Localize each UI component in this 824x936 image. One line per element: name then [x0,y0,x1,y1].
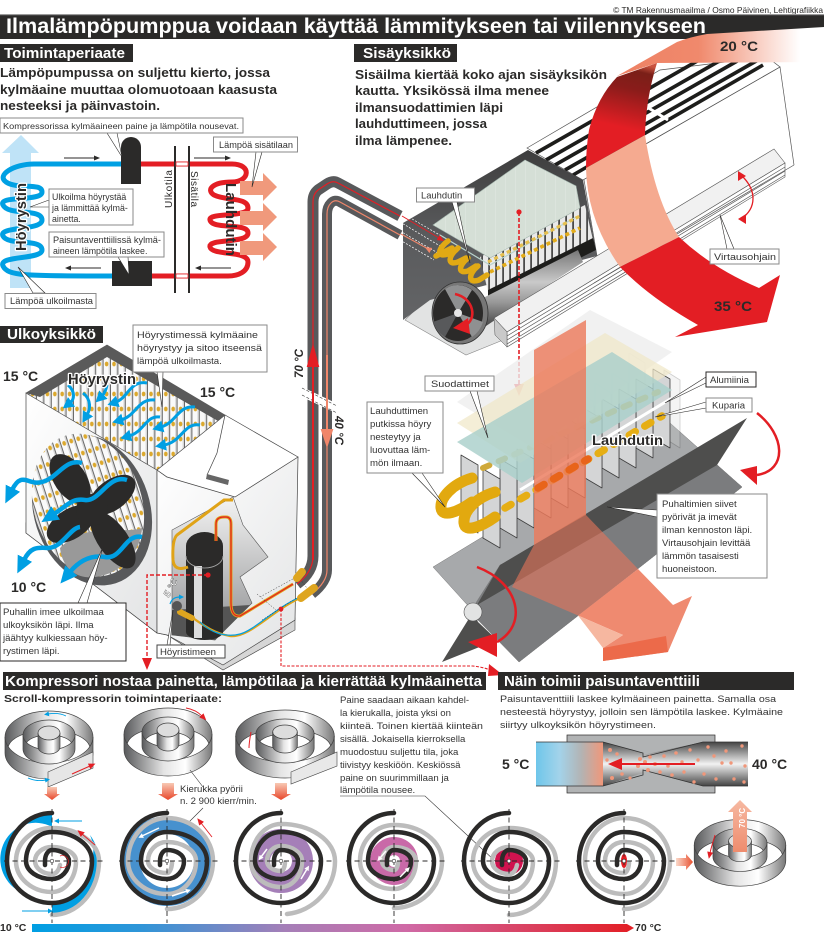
heading: paisuntaventtiili: Näin toimii paisuntaventtiili [504,673,700,690]
callout: puhallin: Puhallin imee ulkoilmaa [3,607,104,618]
fan housing ring [13,419,171,601]
label: ulkotila: Ulkotila [164,170,175,208]
refrigerant pipes [297,182,400,594]
label: 5 °C: 5 °C [502,756,529,772]
right face [157,457,298,665]
evaporator top fins [26,345,225,470]
right nozzle [633,742,703,786]
torn edge [207,415,225,475]
callout: puhaltimien siivet: ilman kennoston läpi. [662,525,752,536]
label: 15 °C right: 15 °C [200,384,235,400]
compressor tank [186,532,223,640]
heading: toimintaperiaate: Toimintaperiaate [4,45,125,62]
heat pump circuit diagram [0,118,298,308]
title bar [0,14,824,39]
label: 35 °C: 35 °C [714,298,752,314]
cold pipe [536,742,603,786]
indoor unit text: lauhduttimeen, jossa [355,116,488,131]
label: höyrystin: Höyrystin [13,183,30,251]
base plates [433,423,742,662]
droplets [605,744,747,784]
label: 70 °C: 70 °C [635,922,662,934]
unit body [403,150,597,320]
grille stripes [536,60,763,175]
top plate [157,415,298,497]
heading: sisäyksikkö: Sisäyksikkö [363,45,451,62]
hot pipe [703,742,748,786]
label: lauhdutin: Lauhdutin [222,183,239,256]
callout: kuparia: Kuparia [712,400,746,412]
callout: ulkoilma: Ulkoilma höyrystää [52,192,126,202]
gold pipes [170,500,310,636]
compressor explanation text: tiivistyy keskiöön. Keskiössä [340,760,461,771]
fan blades [40,447,144,576]
label: kierukka [180,770,257,823]
heated tubes [538,459,588,488]
unit lower edge line [594,165,794,283]
scroll frame 3 [233,809,335,923]
label: 15 °C left: 15 °C [3,368,38,384]
compressor [121,137,141,184]
label: kierukka: n. 2 900 kierr/min. [180,796,257,807]
panel: paisuntaventtiili [498,672,794,793]
compressor explanation text: muodostuu suljettu tila, joka [340,747,459,758]
condenser coil [141,164,248,276]
blower disc [432,282,488,344]
pipes to indoor unit [400,212,445,260]
intro text: Lämpöpumpussa on suljettu kierto, jossa [0,65,271,80]
dashed link to valve [279,607,503,676]
wall lines [175,146,189,293]
callout: suodattimet: Suodattimet [431,379,489,390]
label: 40 °C: 40 °C [752,756,787,772]
heading: paisuntaventtiili [498,672,794,690]
indoor unit illustration [400,27,824,355]
callout: puhaltimien siivet: lämmön tasaisesti [662,551,739,562]
scroll frame 4 [346,809,448,923]
scroll frame 6 [576,809,678,923]
callout: lauhduttimen putkissa: putkissa höyry [370,419,432,430]
fan opening [14,419,162,591]
heading: kompressori: Kompressori nostaa painetta, lämpötilaa ja kierrättää kylmäainetta [5,673,483,690]
arrow: louver swing [738,171,753,224]
label: 70 °C: 70 °C [294,348,306,378]
callout: puhaltimien siivet: Puhaltimien siivet [662,499,737,510]
expansion valve [112,261,152,286]
callout: kompressori [0,118,243,157]
valve diagram [536,735,748,793]
callout: lauhdutin: Lauhdutin [421,190,462,200]
heading: ulkoyksikkö: Ulkoyksikkö [7,326,96,343]
callout: paisuntaventtiili [49,232,164,275]
callout: virtausohjain [710,215,779,264]
callout: alumiinia: Alumiinia [710,375,750,386]
callout: lämpöä ulkoilmasta [5,267,96,308]
callout: paisuntaventtiili: Paisuntaventtiilissä kylmä- [53,235,161,245]
callout: höyrystimessä: lämpöä ulkoilmasta. [137,356,222,367]
3d scroll icon 1 [5,711,93,787]
fins rear [461,353,680,533]
temperature scale [0,922,662,934]
evaporator coil [3,164,121,276]
callout: lauhduttimen putkissa [367,402,445,507]
callout: lauhdutin [416,188,474,263]
callout: ulkoilma: ja lämmittää kylmä- [51,203,128,213]
outer pipe [297,182,400,584]
front face [26,393,157,633]
callout: puhaltimien siivet: pyörivät ja imevät [662,512,737,523]
dashed link to compressor [142,572,211,670]
callout: kuparia [655,398,752,417]
callout: höyrystimessä: höyrystyy ja sitoo itseensä [137,343,263,354]
scroll frame 5 [461,809,563,923]
title: Ilmalämpöpumppua voidaan käyttää lämmitykseen tai viilennykseen [6,15,706,38]
callout: höyristimeen [157,610,225,658]
callout: lauhduttimen putkissa: mön ilmaan. [370,458,422,469]
label: 10 °C: 10 °C [11,579,46,595]
floor plate [405,295,508,355]
callout: lämpöä sisätilaan [214,137,298,187]
callout: alumiinia [665,372,756,403]
arrow: hot flow up [308,347,318,560]
indoor unit text: kautta. Yksikössä ilma menee [355,83,549,98]
3d scroll icon 2 [124,708,212,776]
compressor explanation text [340,695,508,873]
compressor explanation text: Paine saadaan aikaan kahdel- [340,695,469,706]
arrow: left blade rotation [468,567,516,657]
callout: lämpöä ulkoilmasta: Lämpöä ulkoilmasta [10,296,93,306]
callout: höyristimeen: Höyristimeen [160,647,216,658]
callout: lämpöä sisätilaan: Lämpöä sisätilaan [219,140,293,150]
scroll frame 2 [119,809,221,923]
arrow: outdoor air [2,135,39,288]
copper tubes [483,392,662,508]
valve text: nesteestä höyrystyy, jolloin sen lämpötila laskee. Kylmäaine [500,707,783,718]
label: 20 °C: 20 °C [720,38,758,54]
compressor explanation text: paine on suurimmillaan ja [340,773,449,784]
callout: paisuntaventtiili: aineen lämpötila laskee. [53,246,147,256]
callout: ulkoilma [30,189,133,225]
callout: höyrystimessä [133,325,267,407]
callout: puhallin: jäähtyy kulkiessaan höy- [2,633,108,644]
gold u-bends [436,241,487,281]
filter pane [433,160,580,265]
fins row [483,369,670,548]
fan blades [442,418,747,662]
callout: puhaltimien siivet: Virtausohjain levittää [662,538,751,549]
filters [457,310,672,490]
condenser fins [480,205,593,292]
arrow: right blade rotation [740,413,779,485]
top grille surface [527,57,780,180]
panel: condenser detail [367,310,779,662]
fan hub [464,603,482,621]
blue air arrows fan [12,462,142,572]
subheading: scroll: Scroll-kompressorin toimintaperiaate: [4,694,222,705]
arrow: warm air flow [586,27,824,337]
arrow: 70 °C up: 70 °C [738,808,747,828]
valve text: Paisuntaventtiili laskee kylmäaineen painetta. Samalla osa [500,694,777,705]
callout: höyrystimessä: Höyrystimessä kylmäaine [137,330,258,341]
label: lauhdutin: Lauhdutin [592,432,663,448]
label: sisätila: Sisätila [188,171,199,207]
callout: lauhduttimen putkissa: nesteytyy ja [370,432,421,443]
panel: sisäyksikkö [354,27,824,396]
air guide louver [494,149,785,347]
callout: puhallin [0,547,126,661]
callout: suodattimet [425,376,494,438]
arrow: blower rotation [455,294,472,326]
compressor explanation text: kiinteä. Toinen kiertää kiinteän [340,721,483,732]
blower cylinder [480,250,583,330]
indoor unit text: ilma lämpenee. [355,133,452,148]
arrow: to discharge scroll [676,854,693,870]
callout: ulkoilma: ainetta. [52,214,81,224]
inner pipe [312,201,400,594]
label: höyrystin: Höyrystin [68,371,136,388]
dashed link to detail [514,209,524,396]
label: 40 °C: 40 °C [332,415,344,446]
intro text [0,65,278,113]
arrow: warm flow down [322,355,332,445]
3d scroll icon 4 [694,800,786,886]
callout: puhaltimien siivet [607,494,767,578]
valve body [567,735,715,793]
callout: lauhduttimen putkissa: Lauhduttimen [370,406,428,417]
label: 10 °C: 10 °C [0,922,27,934]
callout: puhaltimien siivet: huoneistoon. [662,564,717,575]
callout: puhallin: rystimen läpi. [3,646,60,657]
blue air arrows fins [68,383,200,445]
pipe break and temperatures [294,347,344,560]
3d scroll icon 3 [236,710,337,784]
compressor explanation text: la kierukalla, joista yksi on [340,708,451,719]
valve port [172,601,182,611]
heat arrows [240,173,277,261]
scroll frame 1 [0,809,106,923]
callout: puhallin: ulkoyksikön läpi. Ilma [3,620,94,631]
warm air column [512,320,692,661]
compressor explanation text: sisällä. Jokaisella kierroksella [340,734,466,745]
panel: toimintaperiaate [0,44,298,308]
compressor explanation text: lämpötila nousee. [340,785,415,796]
panel: ulkoyksikkö [0,325,503,676]
left nozzle [603,742,643,786]
intro text: kylmäaine muuttaa olomuotoaan kaasusta [0,82,278,97]
copyright credit: © TM Rakennusmaailma / Osmo Päivinen, Lehtigrafiikka [613,5,823,15]
indoor unit text: ilmansuodattimien läpi [355,100,503,115]
panel: kompressori [0,672,786,934]
u-bends [441,478,495,528]
flow arrows [64,158,231,268]
arrows down [44,783,291,800]
pipe couplers [180,572,314,618]
black base band [488,238,596,304]
interior cutaway [172,497,268,640]
gold tube dots [490,228,580,272]
intro text: nesteeksi ja päinvastoin. [0,98,160,113]
front panel outline [583,67,794,256]
valve text: siirtyy ulkoyksikön höyrystimeen. [500,720,656,731]
indoor unit text [355,67,607,148]
label: 5 °C: 5 °C [162,576,181,599]
arrow: flow [608,758,695,770]
callout: kompressori: Kompressorissa kylmäaineen paine ja lämpötila nousevat. [3,121,239,131]
outdoor unit illustration [12,345,314,670]
base strip [26,523,295,670]
label: kierukka: Kierukka pyörii [180,784,243,795]
pipe passages [176,162,188,278]
callout: virtausohjain: Virtausohjain [714,252,776,263]
indoor unit text: Sisäilma kiertää koko ajan sisäyksikön [355,67,607,82]
callout: lauhduttimen putkissa: luovuttaa läm- [370,445,430,456]
valve text [500,694,783,731]
